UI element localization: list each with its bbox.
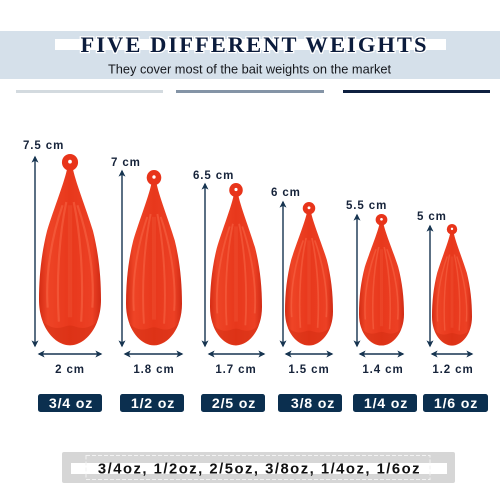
weight badge: 3/8 oz: [291, 396, 335, 412]
height arrow: [356, 215, 358, 346]
weight badge: 1/6 oz: [434, 396, 478, 412]
weight badge: [201, 394, 265, 412]
lure: [285, 202, 333, 346]
width label: 2 cm: [55, 364, 85, 376]
height arrow: [282, 202, 284, 346]
width arrow: [125, 353, 182, 355]
divider bars: [16, 90, 490, 93]
width label: 1.2 cm: [432, 364, 474, 376]
weights summary panel: [62, 452, 455, 483]
height arrow: [429, 226, 431, 346]
width arrow: [432, 353, 472, 355]
weight badge: [38, 394, 102, 412]
height label: 7 cm: [111, 157, 141, 169]
height label: 5.5 cm: [346, 200, 387, 212]
weight badge: [423, 394, 488, 412]
weight badge: 1/4 oz: [364, 396, 408, 412]
height label: 7.5 cm: [23, 140, 64, 152]
width arrow: [286, 353, 332, 355]
width arrow: [39, 353, 101, 355]
weight 6: 1/6 oz: [417, 211, 488, 412]
weight badge: 2/5 oz: [212, 396, 256, 412]
width arrow: [360, 353, 403, 355]
width label: 1.8 cm: [133, 364, 175, 376]
weight 2: 1/2 oz: [111, 157, 184, 412]
weight badge: [353, 394, 417, 412]
weight 4: 3/8 oz: [271, 187, 342, 412]
weight 1: 3/4 oz: [23, 140, 102, 412]
height label: 5 cm: [417, 211, 447, 223]
lure: [210, 183, 262, 345]
height arrow: [34, 157, 36, 346]
weight badge: [278, 394, 342, 412]
height label: 6.5 cm: [193, 170, 234, 182]
header band: [0, 31, 500, 79]
summary text: 3/4oz, 1/2oz, 2/5oz, 3/8oz, 1/4oz, 1/6oz: [98, 462, 421, 478]
weight 5: 1/4 oz: [346, 200, 417, 412]
weight badge: [120, 394, 184, 412]
lure: [359, 214, 404, 346]
weight badge: 3/4 oz: [49, 396, 93, 412]
width label: 1.7 cm: [215, 364, 257, 376]
lure: [432, 224, 472, 346]
width label: 1.5 cm: [288, 364, 330, 376]
weight 3: 2/5 oz: [193, 170, 265, 412]
height arrow: [204, 184, 206, 346]
width label: 1.4 cm: [362, 364, 404, 376]
lure: [126, 170, 182, 345]
height label: 6 cm: [271, 187, 301, 199]
lure: [39, 154, 101, 345]
width arrow: [209, 353, 264, 355]
title: FIVE DIFFERENT WEIGHTS: [80, 32, 429, 57]
subtitle: They cover most of the bait weights on the market: [108, 62, 391, 76]
height arrow: [121, 171, 123, 346]
weight badge: 1/2 oz: [131, 396, 175, 412]
